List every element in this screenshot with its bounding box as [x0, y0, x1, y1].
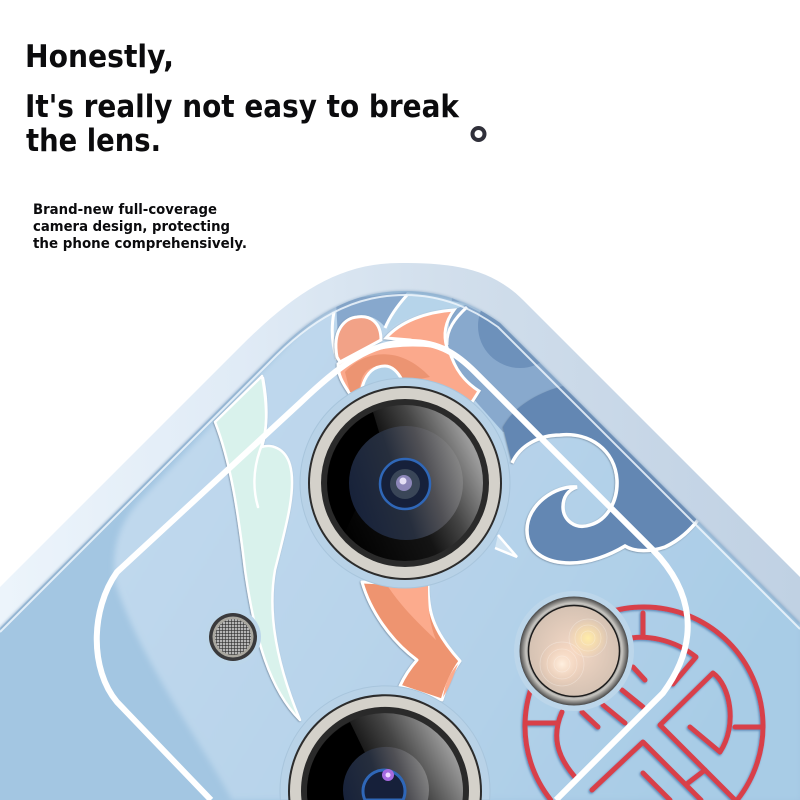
case edge highlight: [0, 292, 800, 629]
description text: [33, 202, 247, 252]
pattern: upper-left blue wedge: [336, 292, 407, 330]
icon: microphone: [205, 609, 261, 665]
pattern: red seal: [525, 607, 763, 800]
description text: Brand-new full-coverage: [33, 202, 217, 218]
pattern: pale fin: [406, 292, 466, 309]
pattern: fin outlines: [332, 295, 467, 360]
pattern: blue wave: [448, 298, 567, 432]
pattern: salmon koi upper: [336, 310, 479, 402]
title: Honestly,: [25, 39, 174, 75]
case outer rim: [0, 263, 800, 800]
panel: phone case: [0, 263, 800, 800]
title: the lens.: [26, 123, 161, 159]
pattern: cloud swirl: [503, 386, 700, 563]
pattern: dark circle: [478, 311, 540, 368]
icon: small ring: [472, 128, 484, 140]
title: [25, 39, 460, 159]
pattern: small white fin: [495, 535, 517, 557]
pattern: salmon koi tail: [362, 582, 460, 700]
pattern: mint fin: [215, 376, 300, 720]
case artwork: [97, 284, 800, 800]
case back surface: [0, 291, 800, 800]
title: It's really not easy to break: [25, 89, 460, 125]
description text: camera design, protecting: [33, 219, 230, 235]
camera bump highlight: [112, 300, 727, 800]
icon: flash: [514, 591, 634, 711]
case edge inner highlight: [0, 295, 800, 632]
icon: main camera lens: [300, 378, 510, 588]
description text: the phone comprehensively.: [33, 236, 247, 252]
camera surround white outline: [97, 342, 688, 800]
icon: secondary camera lens: [280, 686, 490, 800]
